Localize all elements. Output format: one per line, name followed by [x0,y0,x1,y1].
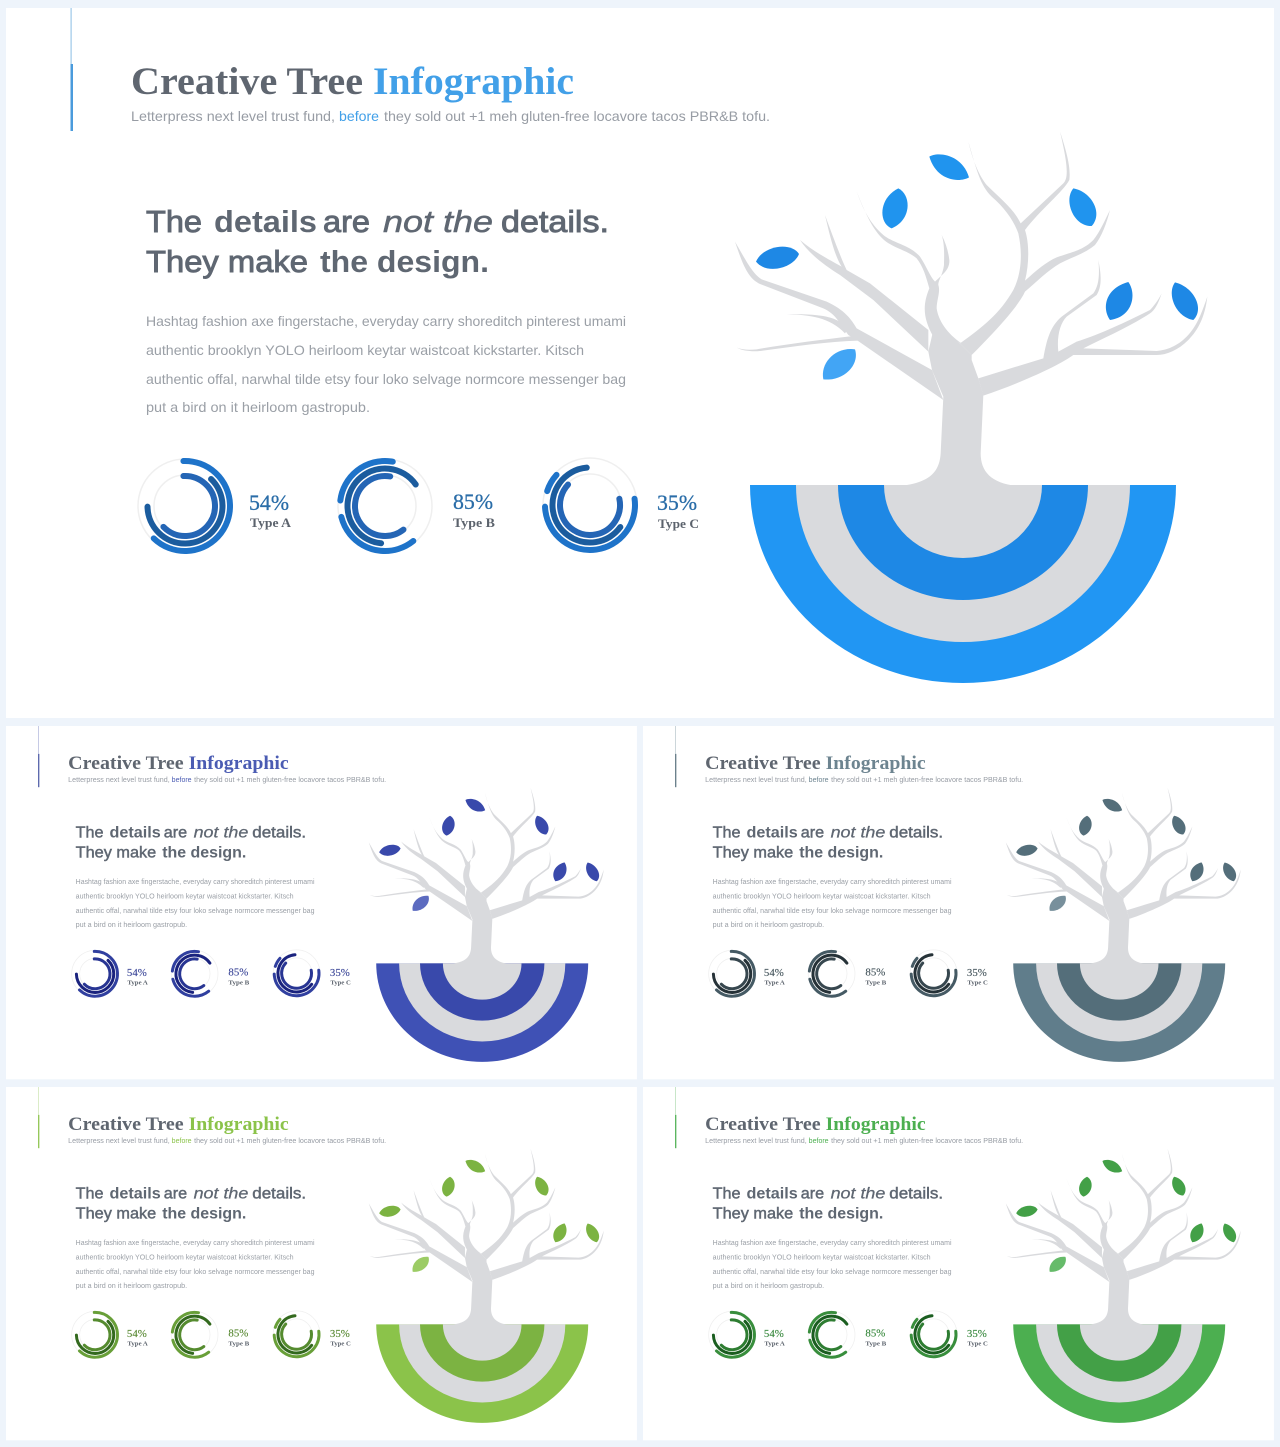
subtitle: Letterpress next level trust fund, [68,1138,170,1145]
panel: lime slide [6,1087,637,1440]
heading: the design. [162,844,246,861]
gauge: Type C [268,945,351,1002]
heading [713,1185,943,1222]
body text: authentic brooklyn YOLO heirloom keytar waistcoat kickstarter. Kitsch [713,1255,931,1262]
tree with semicircle roots [369,788,604,1062]
body text: authentic offal, narwhal tilde etsy four loko selvage normcore messenger bag [76,908,315,915]
gauge: Type A: Type A [127,1340,148,1347]
heading: the design. [799,1205,883,1222]
heading: The [76,824,104,841]
title: Infographic [826,753,926,774]
gauge: Type C: Type C [330,980,351,987]
heading [76,1185,306,1222]
subtitle: Letterpress next level trust fund, [68,777,170,784]
title [68,753,289,774]
title: Infographic [373,60,574,103]
gauge: Type A: 54% [764,967,784,979]
heading: The [713,1185,741,1202]
gauge: Type B [800,942,887,1005]
body text: Hashtag fashion axe fingerstache, everyday carry shoreditch pinterest umami [76,1240,315,1247]
title: Creative Tree [68,1114,184,1135]
panel: slate slide [643,726,1274,1079]
accent line [38,726,39,787]
gauge: Type C: 35% [330,1328,350,1340]
body text: Hashtag fashion axe fingerstache, everyday carry shoreditch pinterest umami [713,879,952,886]
gauge: Type C: 35% [967,1328,987,1340]
body text: Hashtag fashion axe fingerstache, everyday carry shoreditch pinterest umami [76,879,315,886]
body text [713,1240,952,1290]
gauge: Type C [268,1306,351,1363]
title: Infographic [826,1114,926,1135]
heading: The [76,1185,104,1202]
tree with semicircle roots [1006,788,1241,1062]
heading: not the [194,824,248,841]
subtitle: before [809,1138,829,1145]
gauge: Type C: Type C [330,1341,351,1348]
gauge: Type B: Type B [228,1340,250,1347]
heading: The [713,824,741,841]
subtitle: before [172,777,192,784]
body text: authentic brooklyn YOLO heirloom keytar waistcoat kickstarter. Kitsch [146,342,584,358]
heading: They make [713,1205,793,1222]
gauge: Type A: 54% [127,967,147,979]
tree with semicircle roots [369,1149,604,1423]
gauge: Type C [905,945,988,1002]
subtitle: before [809,777,829,784]
heading: not the [194,1185,248,1202]
heading: They make [76,1205,156,1222]
gauge: Type B: 85% [453,489,493,514]
body text [76,1240,315,1290]
accent line [38,1087,39,1148]
title [131,60,574,103]
heading: the design. [320,244,489,279]
title: Creative Tree [68,753,184,774]
body text: put a bird on it heirloom gastropub. [713,922,824,929]
title: Infographic [189,753,289,774]
body text: authentic offal, narwhal tilde etsy four loko selvage normcore messenger bag [713,1269,952,1276]
body text: authentic brooklyn YOLO heirloom keytar waistcoat kickstarter. Kitsch [713,894,931,901]
subtitle: Letterpress next level trust fund, [705,1138,807,1145]
body text: authentic offal, narwhal tilde etsy four loko selvage normcore messenger bag [76,1269,315,1276]
gauge: Type B: 85% [228,1327,248,1339]
body text: authentic brooklyn YOLO heirloom keytar waistcoat kickstarter. Kitsch [76,1255,294,1262]
subtitle: they sold out +1 meh gluten-free locavore tacos PBR&B tofu. [194,777,386,784]
body text [76,879,315,929]
heading: not the [831,1185,885,1202]
heading: They make [146,244,308,279]
title [68,1114,289,1135]
subtitle [705,777,1023,784]
subtitle: they sold out +1 meh gluten-free locavore tacos PBR&B tofu. [194,1138,386,1145]
heading: the design. [799,844,883,861]
gauge: Type A: Type A [764,1340,785,1347]
body text [146,313,626,415]
heading: They make [76,844,156,861]
gauge: Type A [69,947,148,1000]
heading: details. [501,204,609,239]
subtitle [68,777,386,784]
gauge: Type A: Type A [250,515,292,530]
gauge: Type C: Type C [967,980,988,987]
heading: are [801,824,824,841]
body text: put a bird on it heirloom gastropub. [76,1283,187,1290]
subtitle [131,108,770,124]
gauge: Type B: 85% [865,1327,885,1339]
gauge: Type A [706,947,785,1000]
heading: The [146,204,202,239]
heading: are [164,1185,187,1202]
gauge: Type C [905,1306,988,1363]
gauge: Type A [706,1308,785,1361]
gauge: Type B [163,1303,250,1366]
gauge: Type B: Type B [228,979,250,986]
heading: details [110,1185,161,1202]
gauge: Type C: 35% [657,490,697,515]
heading [146,204,609,279]
heading: details [214,204,317,239]
body text [713,879,952,929]
gauge: Type A: Type A [764,979,785,986]
gauge: Type C: Type C [967,1341,988,1348]
gauge: Type B [800,1303,887,1366]
panel: blue main slide [6,8,1274,718]
gauge: Type B: Type B [453,515,495,530]
gauge: Type A: Type A [127,979,148,986]
gauge: Type B: Type B [865,1340,887,1347]
heading: details [747,1185,798,1202]
heading: details. [889,824,943,841]
body text: put a bird on it heirloom gastropub. [713,1283,824,1290]
body text: authentic offal, narwhal tilde etsy four loko selvage normcore messenger bag [713,908,952,915]
subtitle: before [172,1138,192,1145]
gauge: Type B [163,942,250,1005]
gauge: Type C: 35% [967,967,987,979]
tree with semicircle roots [735,132,1207,683]
panel: green slide [643,1087,1274,1440]
panel: indigo slide [6,726,637,1079]
gauge: Type C: Type C [658,516,699,531]
heading [713,824,943,861]
body text: Hashtag fashion axe fingerstache, everyday carry shoreditch pinterest umami [146,313,626,329]
heading: details. [889,1185,943,1202]
heading: are [801,1185,824,1202]
tree with semicircle roots [1006,1149,1241,1423]
heading: details [747,824,798,841]
heading: details [110,824,161,841]
gauge: Type B [322,443,495,569]
accent line [70,8,73,131]
subtitle: they sold out +1 meh gluten-free locavore tacos PBR&B tofu. [831,1138,1023,1145]
heading: the design. [162,1205,246,1222]
subtitle [68,1138,386,1145]
gauge: Type B: 85% [228,966,248,978]
heading: details. [252,1185,306,1202]
gauge: Type A: 54% [764,1328,784,1340]
heading: They make [713,844,793,861]
heading: not the [383,204,493,239]
gauge: Type B: Type B [865,979,887,986]
heading: are [323,204,370,239]
gauge: Type C [533,448,699,562]
heading: not the [831,824,885,841]
subtitle [705,1138,1023,1145]
subtitle: before [339,108,379,124]
title: Creative Tree [705,1114,821,1135]
subtitle: Letterpress next level trust fund, [705,777,807,784]
title: Infographic [189,1114,289,1135]
subtitle: they sold out +1 meh gluten-free locavore tacos PBR&B tofu. [384,108,770,124]
subtitle: they sold out +1 meh gluten-free locavore tacos PBR&B tofu. [831,777,1023,784]
body text: Hashtag fashion axe fingerstache, everyday carry shoreditch pinterest umami [713,1240,952,1247]
accent line [675,1087,676,1148]
body text: authentic offal, narwhal tilde etsy four loko selvage normcore messenger bag [146,371,626,387]
gauge: Type A [132,453,292,559]
title: Creative Tree [705,753,821,774]
title: Creative Tree [131,60,363,103]
gauge: Type A: 54% [249,490,289,515]
gauge: Type A: 54% [127,1328,147,1340]
heading: details. [252,824,306,841]
subtitle: Letterpress next level trust fund, [131,108,335,124]
gauge: Type C: 35% [330,967,350,979]
title [705,753,926,774]
heading: are [164,824,187,841]
heading [76,824,306,861]
body text: authentic brooklyn YOLO heirloom keytar waistcoat kickstarter. Kitsch [76,894,294,901]
body text: put a bird on it heirloom gastropub. [76,922,187,929]
gauge: Type B: 85% [865,966,885,978]
gauge: Type A [69,1308,148,1361]
accent line [675,726,676,787]
body text: put a bird on it heirloom gastropub. [146,399,370,415]
title [705,1114,926,1135]
